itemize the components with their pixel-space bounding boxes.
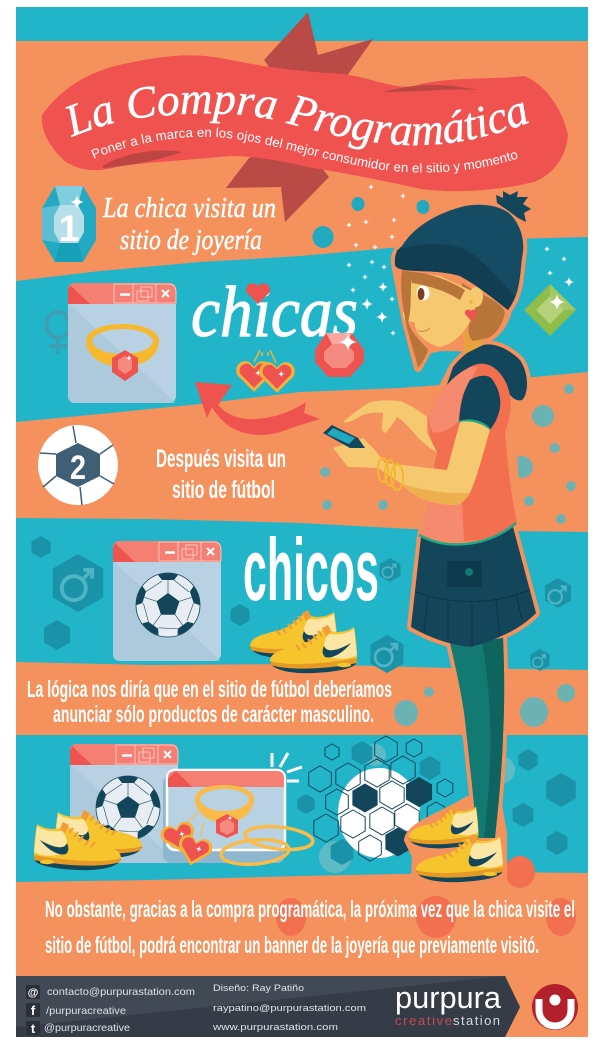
title: La Compra Programática xyxy=(66,86,529,150)
closing text xyxy=(45,896,575,958)
arrow to next step xyxy=(195,382,320,435)
phone xyxy=(323,425,365,448)
venus symbol xyxy=(46,312,70,354)
title banner xyxy=(42,55,568,192)
dots on orange: middle band xyxy=(320,384,576,727)
step 1 gem xyxy=(42,186,96,262)
step 1 text: sitio de joyería xyxy=(120,225,262,256)
bracelets xyxy=(378,458,403,490)
browser window: football xyxy=(113,541,221,661)
girl character xyxy=(323,191,536,884)
step 1 text xyxy=(102,193,276,256)
teal band: chicas xyxy=(16,237,588,422)
contact icons: t xyxy=(31,1021,36,1036)
girl boots xyxy=(409,805,503,882)
icon: football boots xyxy=(250,610,357,673)
step 1 gem: 1 xyxy=(59,208,79,249)
subtitle: Poner a la marca en los ojos del mejor consumidor en el sitio y momento xyxy=(91,128,518,174)
step 2 football badge: 2 xyxy=(70,449,86,487)
purpura wordmark: station xyxy=(453,1013,500,1028)
step 2 text: sitio de fútbol xyxy=(172,476,275,504)
star behind banner xyxy=(226,12,373,222)
contact text: /purpuracreative xyxy=(46,1005,126,1017)
designer credits: www.purpurastation.com xyxy=(212,1022,338,1033)
arms xyxy=(333,400,490,505)
logic text: anunciar sólo productos de carácter masculino. xyxy=(53,701,374,727)
neck and head xyxy=(401,270,505,368)
designer credits: raypatino@purpurastation.com xyxy=(213,1003,366,1014)
icon: heart xyxy=(246,283,270,304)
hat xyxy=(395,191,531,310)
purpura wordmark: purpura xyxy=(395,980,502,1015)
footer bar xyxy=(16,976,520,1037)
step 2 football badge xyxy=(38,425,118,505)
step 1 text: La chica visita un xyxy=(102,193,276,224)
hexagon cluster: bottom scene xyxy=(297,736,576,873)
leg xyxy=(450,638,504,838)
browser window: jewellery xyxy=(68,283,176,403)
leg shade xyxy=(482,638,504,838)
dots on orange: top sky xyxy=(312,197,430,248)
browser window: football again xyxy=(70,744,178,863)
icon: earrings xyxy=(236,350,295,393)
skirt xyxy=(411,527,536,647)
step 2 text xyxy=(156,445,286,504)
teal band: bottom scene xyxy=(16,735,588,882)
designer credits: Diseño: Ray Patiño xyxy=(213,983,304,994)
contact text: @purpuracreative xyxy=(44,1022,130,1034)
teal band: chicos xyxy=(16,518,588,670)
jewellery banner xyxy=(159,753,314,870)
contact text: contacto@purpurastation.com xyxy=(47,986,195,998)
hexagons with male symbols xyxy=(31,536,571,673)
contact icons: @ xyxy=(28,987,39,999)
purpura wordmark: creative xyxy=(395,1013,452,1028)
logic text xyxy=(27,676,392,727)
purpura logo xyxy=(532,984,578,1030)
icon: green gem xyxy=(524,284,576,336)
icon: red gem xyxy=(315,333,364,377)
red dots behind closing text xyxy=(276,856,576,938)
designer credits xyxy=(212,983,366,1033)
top teal band xyxy=(16,7,588,41)
boots bottom-left pair xyxy=(34,810,142,870)
contact text xyxy=(44,986,195,1034)
chicas heading: chicas xyxy=(191,272,358,352)
girl outline silhouette xyxy=(395,205,536,884)
vest and hood xyxy=(419,344,527,544)
contact icons xyxy=(26,985,40,1036)
text: chicos xyxy=(243,520,379,619)
contact icons: f xyxy=(31,1003,36,1018)
sparkles around the girl xyxy=(346,184,574,336)
step 2 text: Después visita un xyxy=(156,445,286,473)
